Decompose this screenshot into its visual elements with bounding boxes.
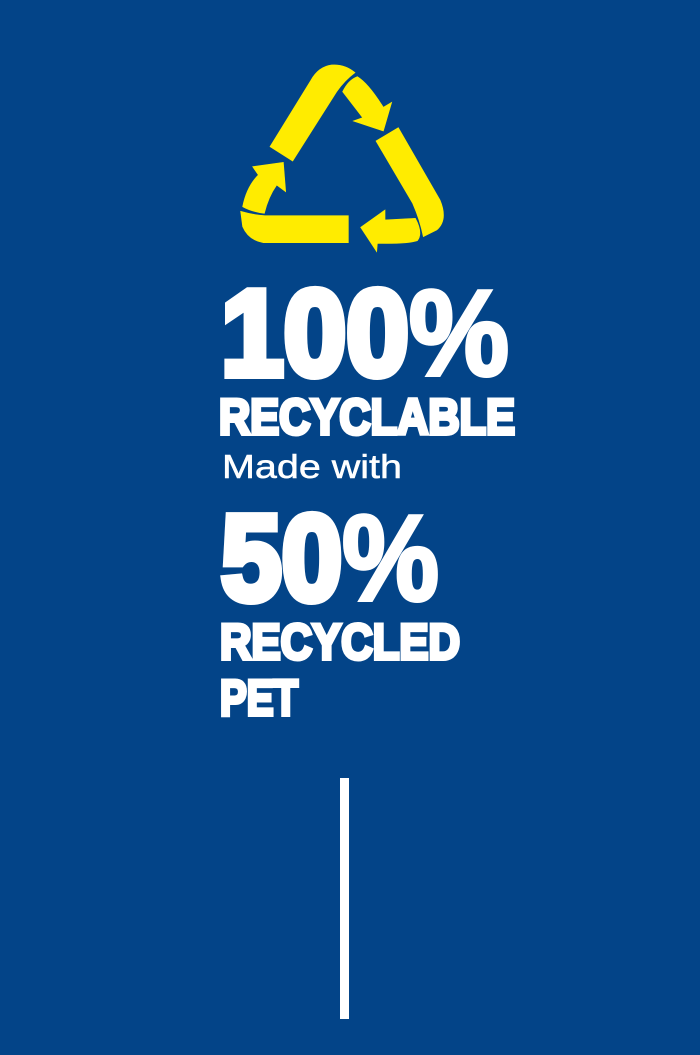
subheading: RECYCLED: RECYCLED <box>220 614 460 670</box>
icon part: top-left band <box>270 65 355 161</box>
icon part: left arrow <box>243 162 286 213</box>
headline: 100%: 100% <box>221 265 509 401</box>
headline: 50%: 50% <box>221 490 439 626</box>
icon part: bottom-right arrow <box>361 210 420 252</box>
subheading: PET: PET <box>220 670 298 726</box>
subheading: RECYCLABLE: RECYCLABLE <box>219 389 515 445</box>
icon: recycling triangle of three arrows <box>241 65 443 252</box>
icon part: bottom band <box>241 211 348 243</box>
icon part: right band <box>376 128 443 237</box>
text: Made with: Made with <box>222 448 402 485</box>
vertical white line <box>340 778 349 1019</box>
icon part: top-right arrow <box>343 77 392 131</box>
